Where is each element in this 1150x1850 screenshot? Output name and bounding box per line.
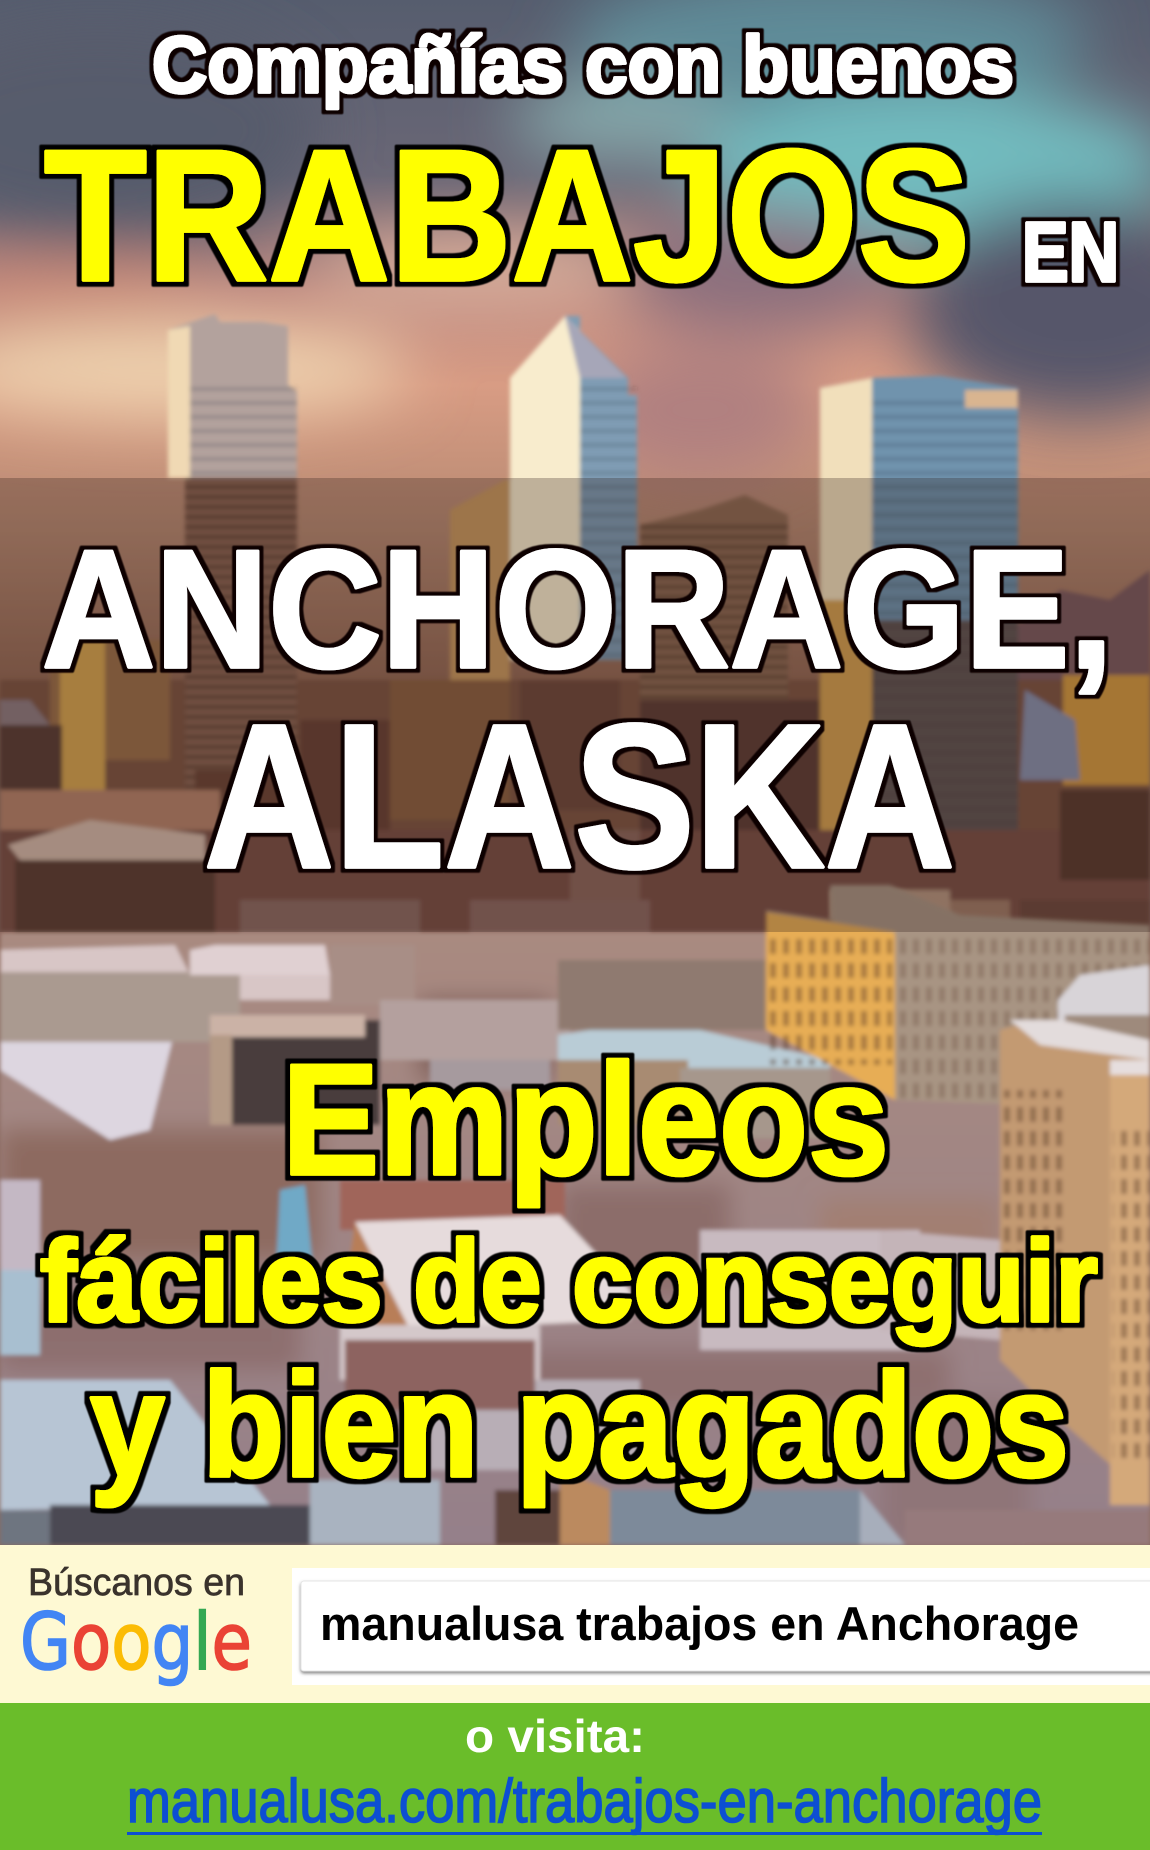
dark mid-ground block bbox=[0, 790, 1150, 940]
search query text: manualusa trabajos en Anchorage bbox=[320, 1597, 1079, 1650]
title: TRABAJOS: TRABAJOS bbox=[44, 111, 970, 320]
headline: y bien pagados: y bien pagados bbox=[90, 1343, 1069, 1508]
panel: website footer bbox=[0, 1703, 1150, 1850]
sky with clouds bbox=[0, 0, 1150, 700]
bottom buildings bbox=[0, 1470, 1150, 1545]
snow ground and roofs bbox=[0, 945, 1000, 1510]
far city mass bbox=[0, 570, 1150, 970]
label: o visita: o visita: bbox=[465, 1710, 645, 1762]
label: Búscanos en: Búscanos en bbox=[28, 1562, 245, 1604]
search box bbox=[301, 1581, 1150, 1671]
snow-roofed mid building bbox=[558, 1030, 830, 1138]
state name: ALASKA: ALASKA bbox=[204, 682, 955, 911]
headline: Empleos: Empleos bbox=[282, 1032, 889, 1208]
left tower bbox=[168, 314, 297, 808]
blue structure and brick building bbox=[275, 1180, 630, 1410]
dark building bbox=[210, 1015, 380, 1125]
logo: Google: Google bbox=[20, 1598, 252, 1688]
mid low-rise towers in band bbox=[0, 480, 1150, 900]
title: EN: EN bbox=[1022, 205, 1119, 299]
yellow lit building bbox=[766, 885, 1150, 1110]
panel: Google search strip bbox=[0, 1545, 1150, 1703]
right glass tower bbox=[820, 376, 1018, 860]
centre pointed tower bbox=[510, 316, 637, 660]
skyline towers bbox=[0, 314, 1150, 970]
dark translucent band bbox=[0, 478, 1150, 932]
trees bbox=[0, 1000, 1030, 1545]
tall right towers bbox=[1000, 965, 1150, 1505]
headline: fáciles de conseguir: fáciles de conseguir bbox=[40, 1216, 1098, 1346]
title line: Compañías con buenos: Compañías con buenos bbox=[152, 20, 1014, 109]
snowy foreground bbox=[0, 885, 1150, 1545]
